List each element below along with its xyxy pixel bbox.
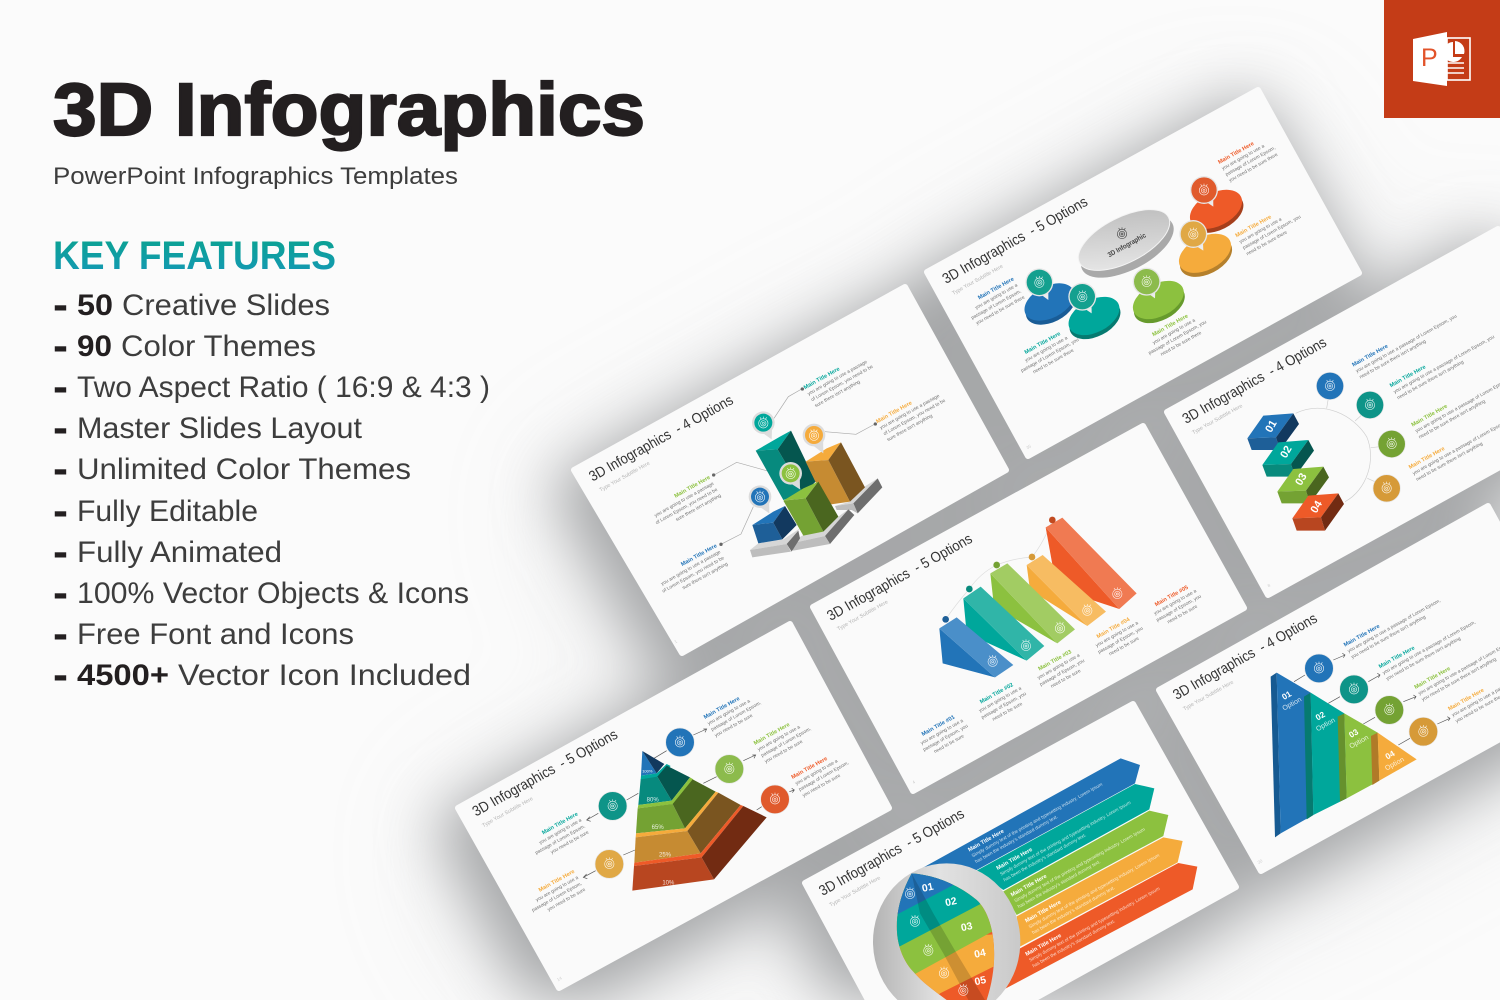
ribbon: red: has been the industry's standard dummy text. [1031,918,1116,968]
colored lens with numbers: 03 [960,921,974,934]
text: orange option: you are going to use a passage [879,393,941,431]
base plates [750,478,882,557]
slide: triangle columns 4 options [1159,506,1500,871]
text: orange option: you need to be sure [546,887,587,913]
text: red option [791,748,854,799]
feature list: - [53,321,68,370]
pyramid tier: blue [641,751,664,776]
slide title: 3D Infographics - 5 Options [940,194,1091,287]
pyramid tier: teal: 80% [647,797,659,803]
page number: 4 [911,779,916,785]
text: blue option [654,543,729,600]
text: blue option: you are going to use a [974,282,1019,311]
text: green option: Main Title Here [1411,404,1449,428]
pin: orange [803,424,825,453]
icon circle: orange [1409,717,1438,746]
slide title: 3D Infographics - 5 Options [470,727,621,820]
ribbon: red: Simply dummy text of the printing and typesetting industry. Lorem Ipsum [1028,886,1161,963]
wedge 02 [963,586,1044,661]
text: teal option: you are going to use a [1024,335,1069,364]
text: orange option [524,869,587,919]
column 02: 02 [1314,709,1327,722]
pyramid tier: red [632,805,767,891]
pyramid tier: green: 65% [652,825,664,831]
text: red option: passage of Lorem Epsom, [798,760,850,793]
pyramid tier: teal [638,764,690,805]
blue bar [752,506,797,543]
text: option 03: need to be sure [1050,668,1082,690]
text: option 01: Main Title #01 [921,715,956,738]
column 03: 03 [1347,726,1360,740]
connector lines and arrows [583,729,794,879]
text: red option: Main Title Here [1217,141,1255,166]
text: option 04: need to be sure [1108,636,1141,657]
icon circle: orange [595,850,624,878]
text: option 05: passage of Epsom, you [1155,594,1203,623]
text: blue option: Main Title Here [680,543,718,568]
heading: key features: KEY FEATURES [53,234,336,278]
text: red option: passage of Lorem Epsom, [1224,145,1277,178]
feature list: 90 [77,330,112,363]
text: blue option: passage of Lorem Epsom, [710,700,762,733]
text: red option: you are going to use a [794,758,839,787]
text: option 02: you are going to use a [978,685,1023,714]
feature list: Color Themes [121,330,316,363]
text: option 02: Main Title #02 [979,682,1015,705]
disc: red [1183,182,1250,241]
text: teal option: need to be sure there isn't anything [1396,359,1465,401]
connector lines and arrows [1294,653,1450,745]
feature list: Master Slides Layout [77,412,363,445]
icon circle: blue [666,728,694,757]
text: green option [647,475,723,532]
text: orange option: Main Title Here [875,400,913,425]
ribbon: teal: Main Title Here [996,847,1034,872]
column 02 [1304,693,1347,819]
feature list: 4500+ [77,659,169,692]
text: option 01: you are going to use a [920,718,965,746]
page number: 1 [673,638,678,644]
feature list: 50 [77,289,113,322]
text: green option: you are going to use a [1152,317,1197,346]
text: teal option: you are going to use a passage of Lorem Epsom, you [1393,334,1496,395]
text: option 02 [973,679,1031,727]
text: teal option [803,352,878,409]
pin: blue disc [1025,268,1053,300]
text: blue option: you need to be sure there [975,294,1026,327]
text: orange option [1235,202,1306,257]
teal bar [756,431,816,500]
text: green option: sure there isn't anything [675,493,723,523]
ribbon: teal: has been the industry's standard dummy text. [1002,832,1087,882]
pyramid tier: orange: 25% [659,853,672,859]
text: red option: Main Title Here [791,756,829,781]
column 02: Option [1315,717,1337,733]
text: teal option: passage of Lorem Epsom, [534,824,587,856]
text: green option: Main Title Here [753,722,791,747]
ribbon: orange: Simply dummy text of the printing and typesetting industry. Lorem Ipsum [1028,853,1160,929]
icon circle: teal [1340,675,1368,704]
pyramid tier: green [636,777,716,833]
text: orange option: you are going to use a [535,875,580,903]
slide title: 3D Infographics - 5 Options [817,806,967,899]
ribbon: blue: Main Title Here [967,829,1005,853]
block 04 [1292,493,1344,531]
text: green option: Main Title Here [1151,313,1190,338]
pyramid tier: blue: 100% [642,769,653,774]
colored lens with numbers: 01 [921,882,935,895]
text: option 04 [1090,613,1148,661]
text: red option: you need to be sure there [1228,152,1279,184]
ribbon: green [1003,811,1168,915]
ribbon: blue: Simply dummy text of the printing and typesetting industry. Lorem Ipsum [971,782,1103,858]
page number: 14 [556,975,563,982]
text: teal option: you are going to use a [538,817,583,846]
column 01: 01 [1280,688,1293,702]
text: blue option: Main Title Here [703,696,741,721]
title: 3D Infographics [53,68,645,151]
feature list [53,280,490,699]
text: green option: passage of Lorem Epsom, you [1147,319,1208,356]
text: blue option: you are going to use a [707,698,752,727]
text: option 01 [915,711,973,759]
text: orange option: Main Title Here [1447,688,1485,712]
column 01 [1271,673,1313,837]
ribbon: blue [922,758,1140,873]
text: blue option: you are going to use a passage [660,549,722,587]
text: option 03: passage of Epsom, you [1039,658,1086,688]
slide title: 3D Infographics - 5 Options [825,531,975,624]
text: green option: you need to be sure [764,739,804,765]
disc: green [1127,273,1191,331]
pyramid tier: orange [634,792,741,863]
text: option 01: need to be sure [933,733,966,755]
ribbon: orange: Main Title Here [1024,900,1062,924]
text: teal option: of Lorem Epsom, you need to be [810,364,875,403]
feature list: - [53,444,68,493]
text: green option: need to be sure there isn't anything [1418,399,1487,440]
feature list: - [53,527,68,576]
feature list: - [53,609,68,658]
slide title: 3D Infographics - 4 Options [1171,611,1320,703]
text: option 01: passage of Epsom, you [922,723,970,753]
text: blue option [703,688,766,739]
ribbon: orange: has been the industry's standard dummy text. [1031,885,1116,935]
wedge 04 [1027,554,1106,626]
text: blue option: need to be sure there isn't anything [1358,339,1428,380]
page number: 35 [1025,443,1033,450]
page number: 30 [1257,858,1264,865]
feature list: - [53,486,68,535]
text: teal option: Main Title Here [541,812,579,836]
wedge 05 [1046,517,1137,609]
disc: teal [1062,289,1127,347]
centre disc [1069,197,1183,290]
slide subtitle: Type Your Subtitle Here [1191,403,1244,436]
orange bar [806,442,865,505]
text: red option [1217,133,1280,184]
text: orange option: you are going to use a [1238,217,1283,245]
text: teal option: you are going to use a passage of Lorem Epsom, [1382,620,1477,676]
page number: 8 [1267,582,1272,588]
text: option 02: need to be sure [991,701,1024,723]
text: blue option: Main Title Here [1351,344,1389,368]
icon circle: green [1378,430,1405,458]
feature list: - [53,280,68,329]
text: green option: you need to be sure there isn't anything [1421,656,1498,703]
pin: teal [752,411,775,439]
slide: 3D discs 5 options [927,90,1359,456]
slide: wedge steps 5 options [813,426,1244,791]
connector curve [946,520,1052,619]
ribbon: red [993,863,1197,995]
text: green option: you are going to use a passage [653,481,716,519]
feature list: Fully Editable [77,495,258,528]
slide subtitle: Type Your Subtitle Here [1182,680,1235,712]
colored lens with numbers: 02 [944,896,958,909]
ribbon: green: has been the industry's standard dummy text. [1017,859,1101,909]
text: green option: Main Title Here [674,475,712,500]
disc: orange [1172,226,1239,285]
text: blue option: of Lorem Epsom, you need to be [661,555,726,594]
text: blue option: passage of Lorem Epsom, [970,289,1023,321]
ribbon: teal: Simply dummy text of the printing and typesetting industry. Lorem Ipsum [999,800,1132,877]
feature list: - [53,403,68,452]
text: teal option: Main Title Here [1389,364,1427,389]
text: blue option: sure there isn't anything [681,561,729,591]
feature list: 100% Vector Objects & Icons [77,577,469,610]
text: orange option: need to be sure there [1245,229,1289,257]
slide title: 3D Infographics - 4 Options [1180,335,1330,427]
ribbon: teal [977,784,1154,890]
subtitle: PowerPoint Infographics Templates [53,163,458,190]
column 03: Option [1348,734,1370,750]
slide: 3D bars 4 options [574,287,1006,653]
text: option 04: Main Title #04 [1096,616,1132,640]
text: green option: Main Title Here [1414,666,1452,691]
ribbon: green: Simply dummy text of the printing and typesetting industry. Lorem Ipsum [1013,827,1146,903]
ribbon: green: Main Title Here [1010,874,1048,898]
block 04: 04 [1308,498,1325,515]
text: teal option: you are going to use a passage [807,359,869,397]
icon circle: green [715,755,744,783]
text: blue option: you need to be sure there isn't anything [1350,614,1427,660]
block 02: 02 [1278,444,1295,460]
text: blue option: Main Title Here [1343,624,1381,648]
ribbon: blue: has been the industry's standard dummy text. [974,814,1059,864]
pin: green [779,462,802,489]
text: teal option: you need to be sure there isn't anything [1385,636,1462,682]
feature list: Vector Icon Included [178,659,471,692]
wedge 01 [939,616,1013,677]
text: orange option: Main Title Here [1408,446,1446,471]
column 04 [1371,733,1417,785]
ribbon: orange [1017,837,1183,947]
text: blue option: you need to be sure [714,713,754,739]
icon circle: orange [1373,475,1400,502]
text: option 02: passage of Epsom, you [980,691,1028,721]
icon circle: red [761,785,789,814]
text: option 03: you are going to use a [1036,652,1081,681]
text: orange option: passage of Lorem Epsom, [531,881,583,913]
slide subtitle: Type Your Subtitle Here [481,796,534,829]
text: blue option [963,276,1026,327]
block 02 [1262,440,1314,477]
text: green option [753,714,816,765]
block 01: 01 [1263,418,1280,435]
colored lens with numbers [896,873,994,1000]
text: option 05: you are going to use a [1153,588,1198,617]
slide: 3D pyramid 5 options [458,624,889,988]
text: option 05: Main Title #05 [1154,585,1190,608]
block 03 [1277,467,1329,503]
text: teal option: Main Title Here [1378,645,1416,670]
feature list: Two Aspect Ratio ( 16:9 & 4:3 ) [77,371,490,404]
feature list: Unlimited Color Themes [77,453,411,486]
text: option 04: you are going to use a [1095,620,1140,649]
icon circle: teal [1356,391,1384,419]
arc with spokes [1296,398,1380,502]
text: green option: you are going to use a [757,724,802,753]
text: option 05 [1148,581,1206,629]
column 03 [1338,713,1379,802]
slide subtitle: Type Your Subtitle Here [836,599,889,632]
text: orange option: Main Title Here [538,869,576,894]
powerpoint badge [1384,0,1500,118]
feature list: Free Font and Icons [77,618,354,651]
powerpoint badge: P [1421,44,1438,72]
block 01 [1247,413,1299,450]
text: option 04: passage of Epsom, you [1097,626,1144,655]
colored lens with numbers: 05 [974,975,987,988]
text: teal option: passage of Lorem Epsom, you [1020,337,1080,374]
icon circle: blue [1305,654,1333,683]
text: orange option: Main Title Here [1235,214,1273,239]
column 04: 04 [1383,748,1397,761]
slide: ribbon arrows through ring 5 options [805,704,1236,1000]
colored lens with numbers: 04 [973,948,987,961]
slide title: 3D Infographics - 4 Options [587,393,736,485]
text: green option: passage of Lorem Epsom, [760,726,812,759]
connector lines [712,387,877,546]
pin: red disc [1190,176,1218,207]
text: blue option: Main Title Here [977,277,1015,301]
text: teal option [527,811,590,862]
text: green option: of Lorem Epsom, you need to be [655,487,719,526]
text: teal option: Main Title Here [803,366,841,391]
text: blue option: you are going to use a passage of Lorem Epsom, you [1355,313,1458,374]
slide subtitle: Type Your Subtitle Here [829,875,882,908]
pin: teal disc [1068,283,1096,313]
slide: stacked blocks 4 options [1167,229,1500,595]
feature list: - [53,362,68,411]
wide soft shadow [445,118,1500,985]
text: orange option [875,386,951,443]
text: option 05: need to be sure [1166,604,1199,625]
feature list: - [53,650,68,699]
feature list: Creative Slides [122,289,330,322]
pin: orange disc [1179,220,1207,251]
slide subtitle: Type Your Subtitle Here [599,461,651,493]
text: teal option: sure there isn't anything [814,379,862,409]
text: teal option: need to be sure there [1032,348,1075,375]
slide subtitle: Type Your Subtitle Here [951,264,1004,297]
text: red option: you need to be sure [801,773,842,799]
text: blue option: you are going to use a passage of Lorem Epsom, [1347,598,1442,654]
text: teal option: Main Title Here [1024,331,1062,356]
green bar [783,482,838,536]
text: red option: you are going to use a [1221,143,1266,172]
icon circle: teal [598,792,627,820]
text: option 03: Main Title #03 [1037,649,1073,672]
feature list: - [53,568,68,617]
text: orange option: sure there isn't anything [886,413,934,443]
text: green option [1140,307,1212,362]
text: teal option: you need to be sure [550,829,590,856]
text: orange option: of Lorem Epsom, you need to be [882,398,947,437]
disc: blue [1018,276,1082,332]
text: orange option: passage of Lorem Epsom, you [1242,214,1302,251]
pyramid tier: red: 10% [662,881,675,887]
grey ring [873,863,1020,1000]
feature list: Fully Animated [77,536,282,569]
column 01: Option [1281,696,1303,712]
block 03: 03 [1293,471,1310,488]
centre disc: 3D Infographic [1107,232,1148,259]
ribbon: red: Main Title Here [1025,933,1063,958]
text: teal option [1013,325,1084,380]
icon circle: blue [1316,372,1344,400]
wedge 03 [990,562,1075,643]
slide drop shadows [450,108,1500,985]
pin: blue [749,485,771,513]
text: green option: need to be sure there [1160,330,1203,358]
icon circle: green [1375,696,1404,724]
text: option 03 [1032,646,1090,694]
column 04: Option [1384,756,1406,772]
pin: green disc [1133,268,1161,298]
text: orange option: need to be sure there isn't anything [1415,441,1484,483]
